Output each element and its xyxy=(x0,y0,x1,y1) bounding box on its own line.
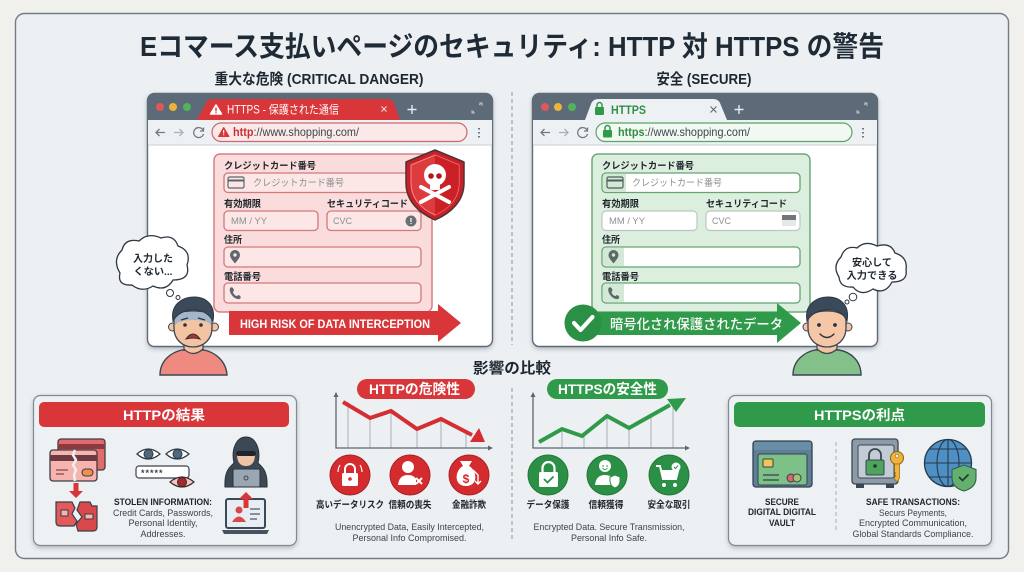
expiry field: 有効期限 xyxy=(602,198,639,210)
security code field xyxy=(327,199,421,230)
text: https safety summary: Personal Info Safe. xyxy=(571,533,647,544)
address field xyxy=(602,234,800,267)
address bar: https xyxy=(596,123,852,142)
thought bubble: relieved: 入力できる xyxy=(846,269,898,282)
address bar: http xyxy=(212,123,467,142)
icon: data protection xyxy=(528,455,568,495)
label: high data risk: 高いデータリスク xyxy=(316,499,384,511)
panel: https benefits xyxy=(728,396,992,546)
browser tab: warning xyxy=(197,99,400,120)
arrow: high risk of data interception xyxy=(229,304,461,342)
heading: secure: 安全 (SECURE) xyxy=(656,70,752,88)
panel: https safety xyxy=(526,379,690,544)
phone field xyxy=(224,271,421,303)
text: http risks summary xyxy=(335,522,484,544)
text: safe transactions xyxy=(852,497,974,540)
header: https benefits: HTTPSの利点 xyxy=(814,407,905,423)
arrow: encrypted data xyxy=(564,303,801,343)
arrow: high risk of data interception: HIGH RISK OF DATA INTERCEPTION xyxy=(240,317,430,331)
expiry field xyxy=(602,198,697,230)
new tab and expand icons xyxy=(734,103,867,114)
text: secure digital vault: SECURE xyxy=(765,497,799,508)
text: https safety summary: Encrypted Data. Secure Transmission, xyxy=(534,522,684,533)
pill: http danger: HTTPの危険性 xyxy=(369,381,460,397)
icon: loss of trust xyxy=(390,455,430,495)
text: https safety summary xyxy=(534,522,684,544)
text: safe transactions: Encrypted Communication, xyxy=(859,518,967,529)
chart: falling trend xyxy=(334,392,493,450)
address bar: http: http://www.shopping.com/ xyxy=(233,125,360,139)
icon: globe with shield xyxy=(924,440,976,491)
address field xyxy=(224,234,421,267)
arrow: encrypted data: 暗号化され保護されたデータ xyxy=(610,316,783,332)
card number field: クレジットカード番号 xyxy=(632,177,722,189)
browser tab: secure xyxy=(585,99,727,120)
header: http consequences: HTTPの結果 xyxy=(123,407,205,423)
panel: http danger xyxy=(316,379,493,544)
panel: http consequences xyxy=(34,396,296,546)
text: stolen information: Personal Identily, xyxy=(128,518,198,529)
address field: 住所 xyxy=(224,234,242,246)
heading: impact comparison: 影響の比較 xyxy=(473,359,551,377)
person: relieved xyxy=(793,297,861,375)
new tab and expand icons xyxy=(408,103,482,114)
header: https benefits xyxy=(734,402,985,427)
label: secure transaction: 安全な取引 xyxy=(648,499,690,511)
window buttons xyxy=(156,103,191,111)
phone field: 電話番号 xyxy=(224,271,261,283)
panel: insecure browser xyxy=(148,94,492,346)
expiry field: MM / YY xyxy=(231,216,268,227)
text: secure digital vault: VAULT xyxy=(769,518,795,529)
text: safe transactions: Securs Peyments, xyxy=(879,508,947,519)
address bar: https: https://www.shopping.com/ xyxy=(618,125,751,139)
label: loss of trust: 信頼の喪失 xyxy=(388,499,432,511)
card number field: クレジットカード番号 xyxy=(224,160,316,172)
label: financial fraud: 金融詐欺 xyxy=(452,499,486,511)
window buttons xyxy=(541,103,576,111)
label: trust gained: 信頼獲得 xyxy=(588,499,624,511)
icon: torn cards xyxy=(50,439,105,481)
security code field: CVC xyxy=(712,216,731,227)
address field: 住所 xyxy=(602,234,620,246)
text: http risks summary: Personal Info Compromised. xyxy=(352,533,466,544)
icon: financial fraud: $ xyxy=(463,472,470,486)
icon: secure transaction xyxy=(649,455,689,495)
icon: safe and key xyxy=(852,439,904,488)
card number field xyxy=(224,160,421,192)
icon: financial fraud xyxy=(449,455,489,495)
text: safe transactions: Global Standards Compliance. xyxy=(852,529,974,540)
expiry field: MM / YY xyxy=(609,216,646,227)
pill: https safety: HTTPSの安全性 xyxy=(558,381,657,397)
center divider xyxy=(511,92,513,542)
thought bubble: worried xyxy=(116,236,188,300)
text: secure digital vault xyxy=(748,497,816,529)
icon: hacker xyxy=(225,437,267,487)
security code field xyxy=(706,199,800,230)
security code field: CVC xyxy=(333,216,352,227)
thought bubble: relieved: 安心して xyxy=(852,256,892,269)
icon: high data risk xyxy=(330,455,370,495)
icon: watching eyes and password xyxy=(136,449,194,487)
text: http risks summary: Unencrypted Data, Easily Intercepted, xyxy=(335,522,484,533)
card number field: クレジットカード番号 xyxy=(602,160,694,172)
icon: laptop with identity xyxy=(222,492,269,534)
text: secure digital vault: DIGITAL DIGITAL xyxy=(748,507,816,518)
chart: rising trend xyxy=(530,392,690,450)
pill: http danger xyxy=(357,379,475,399)
thought bubble: worried: くない... xyxy=(134,266,173,278)
text: safe transactions: SAFE TRANSACTIONS: xyxy=(866,497,960,508)
toolbar navigation xyxy=(541,128,863,138)
security code field: セキュリティコード xyxy=(327,199,408,210)
security code field: セキュリティコード xyxy=(706,199,787,210)
icon: watching eyes and password: ***** xyxy=(141,468,164,478)
pill: https safety xyxy=(547,379,668,399)
header: http consequences xyxy=(39,402,289,427)
divider line xyxy=(835,442,837,533)
payment form: secure xyxy=(592,154,810,312)
text: stolen information xyxy=(113,497,213,540)
phone field xyxy=(602,271,800,303)
browser tab: warning: HTTPS - 保護された通信 xyxy=(227,102,339,116)
person: worried xyxy=(160,297,227,375)
heading: critical danger: 重大な危険 (CRITICAL DANGER) xyxy=(214,70,424,88)
thought bubble: worried: 入力した xyxy=(133,252,173,265)
expiry field xyxy=(224,198,318,230)
icon: skull shield xyxy=(406,150,464,220)
phone field: 電話番号 xyxy=(602,271,639,283)
label: data protection: データ保護 xyxy=(526,499,570,511)
text: stolen information: Credit Cards, Passwords, xyxy=(113,508,213,519)
thought bubble: relieved xyxy=(836,243,906,304)
card number field: クレジットカード番号 xyxy=(253,177,344,189)
icon: trust gained xyxy=(587,455,627,495)
icon: damaged cards xyxy=(56,502,97,531)
browser tab: secure: HTTPS xyxy=(611,105,646,117)
card number field xyxy=(602,160,800,192)
icon: secure digital vault xyxy=(753,441,812,487)
payment form: danger xyxy=(214,154,432,312)
panel: secure browser xyxy=(532,94,878,346)
text: stolen information: Addresses. xyxy=(140,529,186,540)
toolbar navigation xyxy=(156,128,479,138)
title: Eコマース支払いページのセキュリティ: HTTP 対 HTTPS の警告 xyxy=(140,31,884,62)
arrow: down xyxy=(69,483,83,498)
text: stolen information: STOLEN INFORMATION: xyxy=(114,497,212,508)
expiry field: 有効期限 xyxy=(224,198,261,210)
